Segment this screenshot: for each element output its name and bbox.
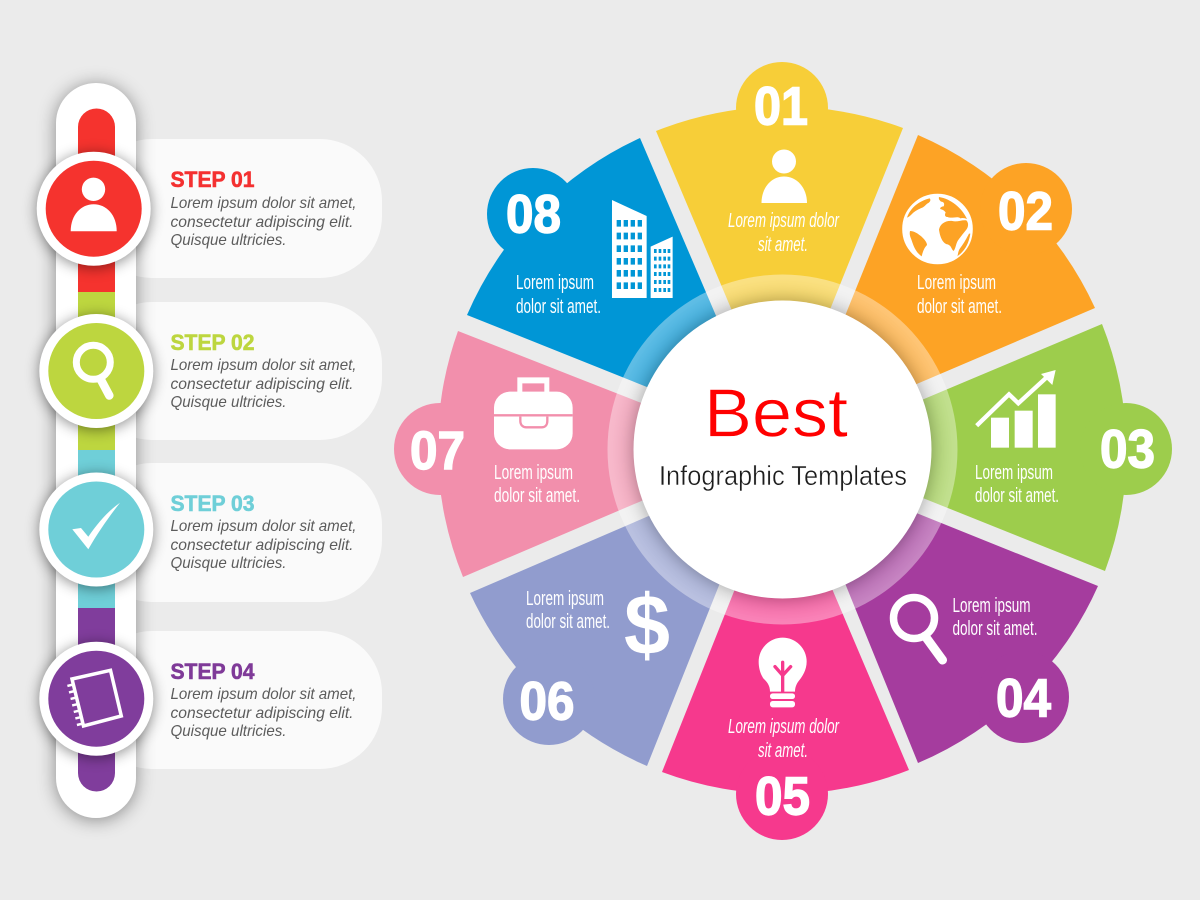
wheel segment 01 — [656, 62, 903, 429]
hub title: Infographic Templates — [659, 460, 907, 491]
step 2 text: Lorem ipsum dolor sit amet, — [170, 357, 356, 374]
number 08: 08 — [506, 184, 561, 244]
caption 08 — [516, 272, 601, 318]
caption 07: dolor sit amet. — [494, 485, 580, 507]
step 4 text: STEP 04 — [170, 659, 255, 684]
step 3 text: consectetur adipiscing elit. — [170, 537, 354, 554]
step card 2 — [90, 302, 382, 440]
step 1 text: Lorem ipsum dolor sit amet, — [170, 195, 356, 212]
caption 05: Lorem ipsum dolor — [728, 716, 840, 738]
hub title — [659, 374, 907, 491]
step 2 text — [170, 330, 356, 411]
step 4 text: consectetur adipiscing elit. — [170, 705, 354, 722]
caption 02 — [917, 272, 1002, 318]
step 2 text: STEP 02 — [170, 330, 254, 355]
icon: dollar sign: $ — [624, 578, 670, 673]
hub white circle — [634, 300, 932, 598]
step 1 text — [170, 167, 356, 249]
caption 03 — [975, 462, 1059, 507]
step 1 text: STEP 01 — [170, 167, 254, 192]
wheel segment 06 — [470, 465, 767, 766]
number 07: 07 — [410, 421, 465, 481]
step 3 text: Lorem ipsum dolor sit amet, — [170, 518, 356, 535]
icon: person — [762, 150, 807, 203]
step 2 text: Quisque ultricies. — [170, 394, 286, 411]
caption 04 — [952, 595, 1038, 640]
caption 08: Lorem ipsum — [516, 272, 594, 294]
caption 07 — [494, 462, 580, 507]
caption 02: dolor sit amet. — [917, 296, 1002, 318]
wheel segment 02 — [797, 135, 1095, 435]
step 4 text — [170, 659, 356, 740]
caption 08: dolor sit amet. — [516, 296, 601, 318]
caption 02: Lorem ipsum — [917, 272, 996, 294]
step card 3 — [90, 463, 382, 602]
step card 1 — [90, 139, 382, 278]
icon: growth chart — [977, 370, 1056, 448]
wheel segment 03 — [803, 324, 1172, 571]
caption 06: Lorem ipsum — [526, 588, 604, 610]
vertical timeline track — [56, 83, 136, 818]
caption 05 — [728, 716, 840, 762]
caption 06: dolor sit amet. — [526, 611, 610, 633]
caption 01 — [728, 210, 840, 256]
caption 05: sit amet. — [758, 740, 808, 762]
step badge 3: check mark — [39, 472, 153, 586]
wheel segment 08 — [467, 138, 767, 435]
step 2 text: consectetur adipiscing elit. — [170, 376, 354, 393]
translucent hub ring — [608, 274, 958, 624]
step card 4 — [90, 631, 382, 769]
step badge 1: person — [37, 152, 151, 266]
hub title: Best — [704, 374, 848, 452]
icon: magnifier — [894, 598, 942, 660]
timeline colored bar — [78, 108, 115, 792]
caption 04: Lorem ipsum — [952, 595, 1030, 617]
step badge 2: magnifier — [39, 314, 153, 428]
caption 04: dolor sit amet. — [952, 618, 1038, 640]
step 4 text: Lorem ipsum dolor sit amet, — [170, 686, 356, 703]
icon: globe — [903, 194, 972, 264]
caption 01: sit amet. — [758, 234, 808, 256]
step 3 text: STEP 03 — [170, 491, 254, 516]
wheel segment 05 — [662, 471, 909, 840]
icon: light bulb — [759, 638, 807, 707]
icon: briefcase — [494, 377, 573, 449]
caption 01: Lorem ipsum dolor — [728, 210, 840, 232]
wheel segment 04 — [797, 465, 1098, 763]
step 1 text: Quisque ultricies. — [170, 232, 286, 249]
wheel segment 07 — [394, 331, 761, 577]
step 4 text: Quisque ultricies. — [170, 723, 286, 740]
step 1 text: consectetur adipiscing elit. — [170, 214, 354, 231]
number 05: 05 — [755, 766, 810, 826]
number 02: 02 — [998, 182, 1053, 242]
caption 03: dolor sit amet. — [975, 485, 1059, 507]
step 3 text: Quisque ultricies. — [170, 555, 286, 572]
step 3 text — [170, 491, 356, 572]
icon: buildings — [612, 200, 673, 298]
caption 03: Lorem ipsum — [975, 462, 1053, 484]
number 03: 03 — [1100, 420, 1155, 480]
number 01: 01 — [754, 76, 808, 136]
caption 07: Lorem ipsum — [494, 462, 573, 484]
step badge 4: notebook — [39, 642, 153, 756]
number 06: 06 — [520, 672, 574, 732]
caption 06 — [526, 588, 610, 633]
number 04: 04 — [996, 668, 1051, 728]
